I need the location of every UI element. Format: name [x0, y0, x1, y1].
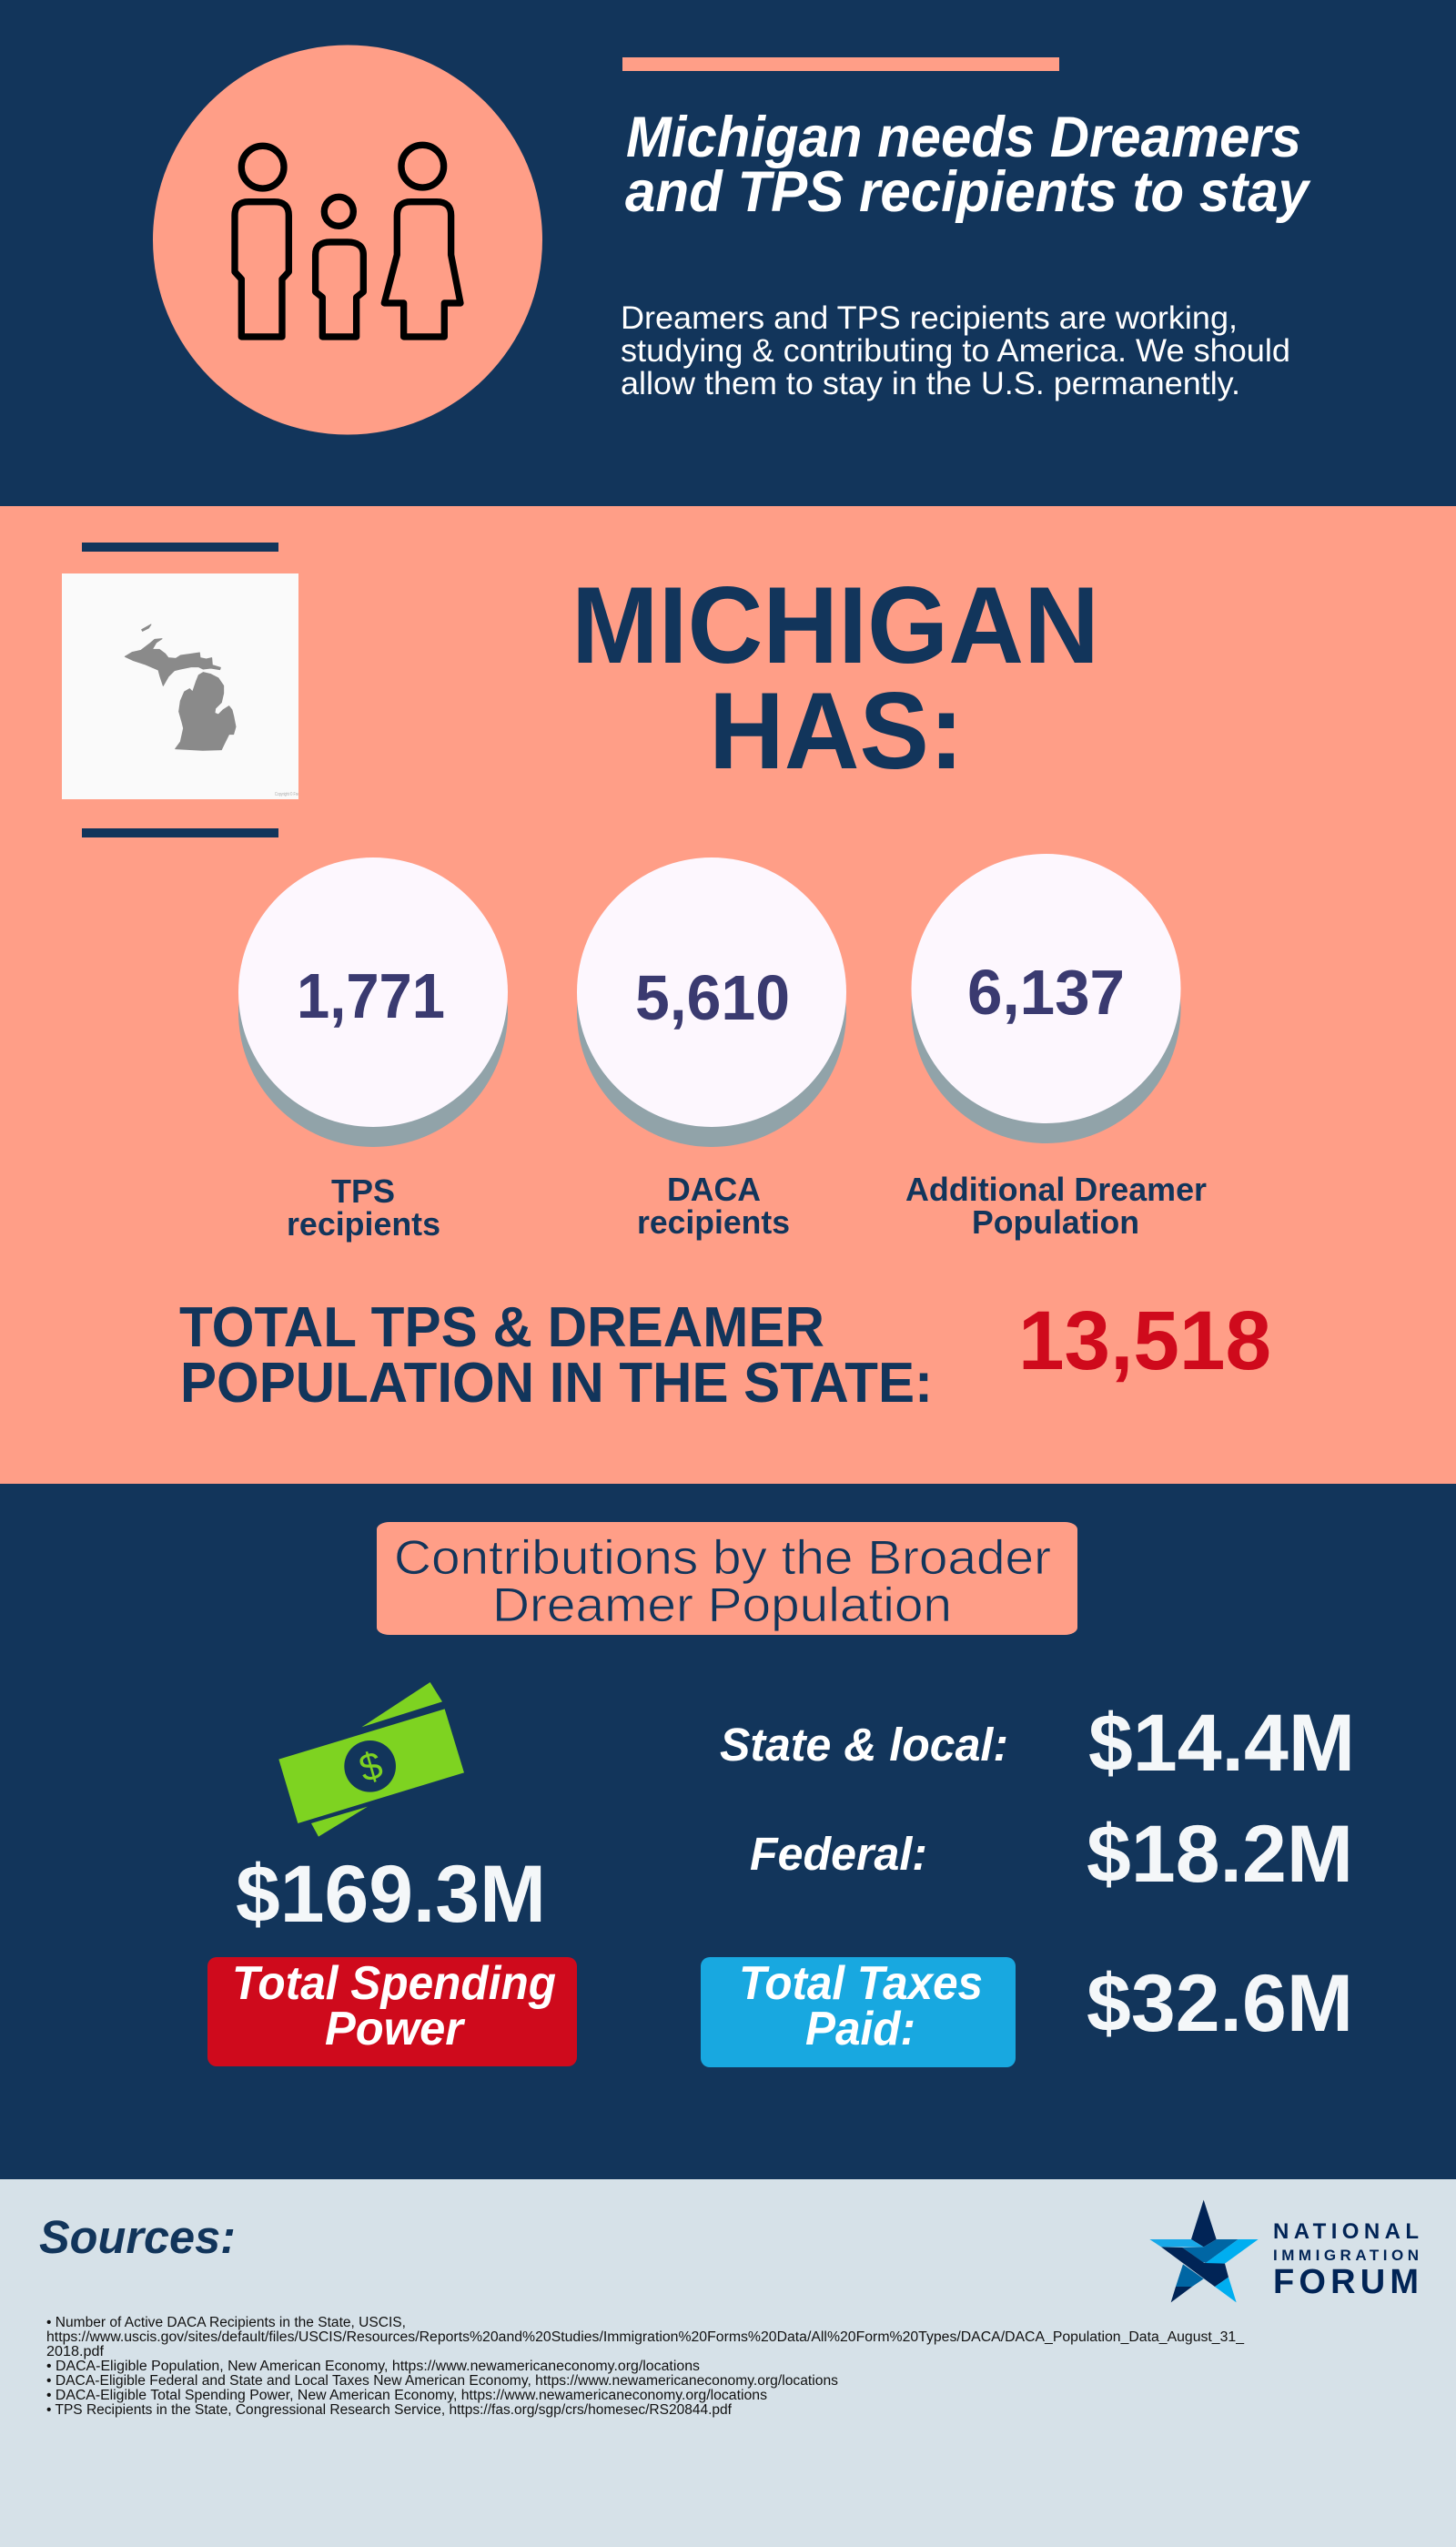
panel: contributions — [0, 1484, 1456, 2178]
icon: money — [278, 1682, 464, 1837]
federal taxes — [750, 1808, 1353, 1899]
heading: MICHIGAN — [571, 564, 1099, 686]
total taxes value: $32.6M — [1087, 1957, 1353, 2048]
panel: Michigan has — [0, 506, 1456, 1484]
decorative top bar — [82, 543, 278, 552]
icon: money: $ — [355, 1743, 388, 1791]
state and local taxes: State & local: — [720, 1719, 1008, 1771]
logo: National Immigration Forum: IMMIGRATION — [1273, 2247, 1419, 2264]
stat: TPS recipients: TPS — [331, 1172, 395, 1210]
contributions heading — [377, 1522, 1077, 1635]
contributions heading: Dreamer Population — [492, 1578, 952, 1632]
intro text: studying & contributing to America. We should — [621, 333, 1290, 369]
federal taxes: $18.2M — [1087, 1808, 1353, 1899]
source list: • TPS Recipients in the State, Congressional Research Service, https://fas.org/sgp/crs/homesec/RS20844.pdf — [46, 2402, 733, 2418]
icon: Michigan map — [62, 573, 298, 799]
total label: POPULATION IN THE STATE: — [180, 1352, 933, 1415]
logo: National Immigration Forum: FORUM — [1273, 2263, 1419, 2301]
decorative bottom bar — [82, 828, 278, 837]
state and local taxes — [720, 1697, 1355, 1788]
stat: additional Dreamer population: Additional Dreamer — [905, 1171, 1207, 1208]
title: Michigan needs Dreamers — [626, 106, 1301, 169]
stat: DACA recipients: DACA — [667, 1171, 761, 1208]
stat: TPS recipients: 1,771 — [297, 960, 445, 1031]
stat: additional Dreamer population: Population — [972, 1203, 1139, 1241]
spending power label: Power — [325, 2003, 466, 2055]
total taxes label: Paid: — [805, 2003, 915, 2055]
stat: additional Dreamer population: 6,137 — [967, 957, 1125, 1028]
panel: header — [0, 0, 1456, 506]
source list: 2018.pdf — [46, 2344, 105, 2359]
spending power label — [207, 1957, 577, 2066]
stat: DACA recipients: 5,610 — [635, 962, 790, 1033]
title — [625, 106, 1311, 224]
stat: additional Dreamer population — [905, 854, 1207, 1241]
intro text: allow them to stay in the U.S. permanently. — [621, 366, 1240, 401]
total label — [179, 1296, 933, 1415]
heading — [571, 564, 1099, 792]
intro text: Dreamers and TPS recipients are working, — [621, 300, 1238, 336]
state and local taxes: $14.4M — [1088, 1697, 1355, 1788]
logo: National Immigration Forum — [1149, 2200, 1419, 2302]
icon: Michigan map: Copyright © Fre — [275, 791, 298, 797]
stat: TPS recipients — [238, 857, 508, 1243]
source list — [46, 2315, 1244, 2418]
title: and TPS recipients to stay — [625, 160, 1311, 224]
panel: sources — [0, 2179, 1456, 2547]
source list: https://www.uscis.gov/sites/default/files/USCIS/Resources/Reports%20and%20Studies/Immigration%20Forms%20Data/All%20Form%20Types/DACA/DACA_Population_Data_August_31_ — [46, 2329, 1244, 2345]
sources heading: Sources: — [39, 2211, 236, 2263]
stat: DACA recipients — [577, 857, 846, 1241]
logo: National Immigration Forum: NATIONAL — [1273, 2219, 1419, 2244]
intro text — [621, 300, 1290, 401]
total taxes label — [701, 1957, 1016, 2067]
source list: • DACA-Eligible Total Spending Power, New American Economy, https://www.newamericaneconomy.org/locations — [46, 2388, 767, 2403]
source list: • Number of Active DACA Recipients in the State, USCIS, — [46, 2315, 406, 2330]
heading: HAS: — [709, 670, 964, 792]
source list: • DACA-Eligible Population, New American Economy, https://www.newamericaneconomy.org/locations — [46, 2359, 700, 2374]
accent bar — [622, 57, 1059, 71]
total taxes label: Total Taxes — [739, 1957, 983, 2010]
source list: • DACA-Eligible Federal and State and Local Taxes New American Economy, https://www.newamericaneconomy.org/locations — [46, 2373, 838, 2389]
total number: 13,518 — [1018, 1294, 1271, 1387]
stat: DACA recipients: recipients — [637, 1203, 790, 1241]
spending power value: $169.3M — [236, 1848, 546, 1939]
stat: TPS recipients: recipients — [287, 1205, 440, 1243]
federal taxes: Federal: — [750, 1828, 927, 1880]
contributions heading: Contributions by the Broader — [394, 1531, 1051, 1585]
icon: family in salmon circle — [153, 46, 542, 435]
total label: TOTAL TPS & DREAMER — [179, 1296, 824, 1359]
spending power label: Total Spending — [232, 1957, 556, 2010]
